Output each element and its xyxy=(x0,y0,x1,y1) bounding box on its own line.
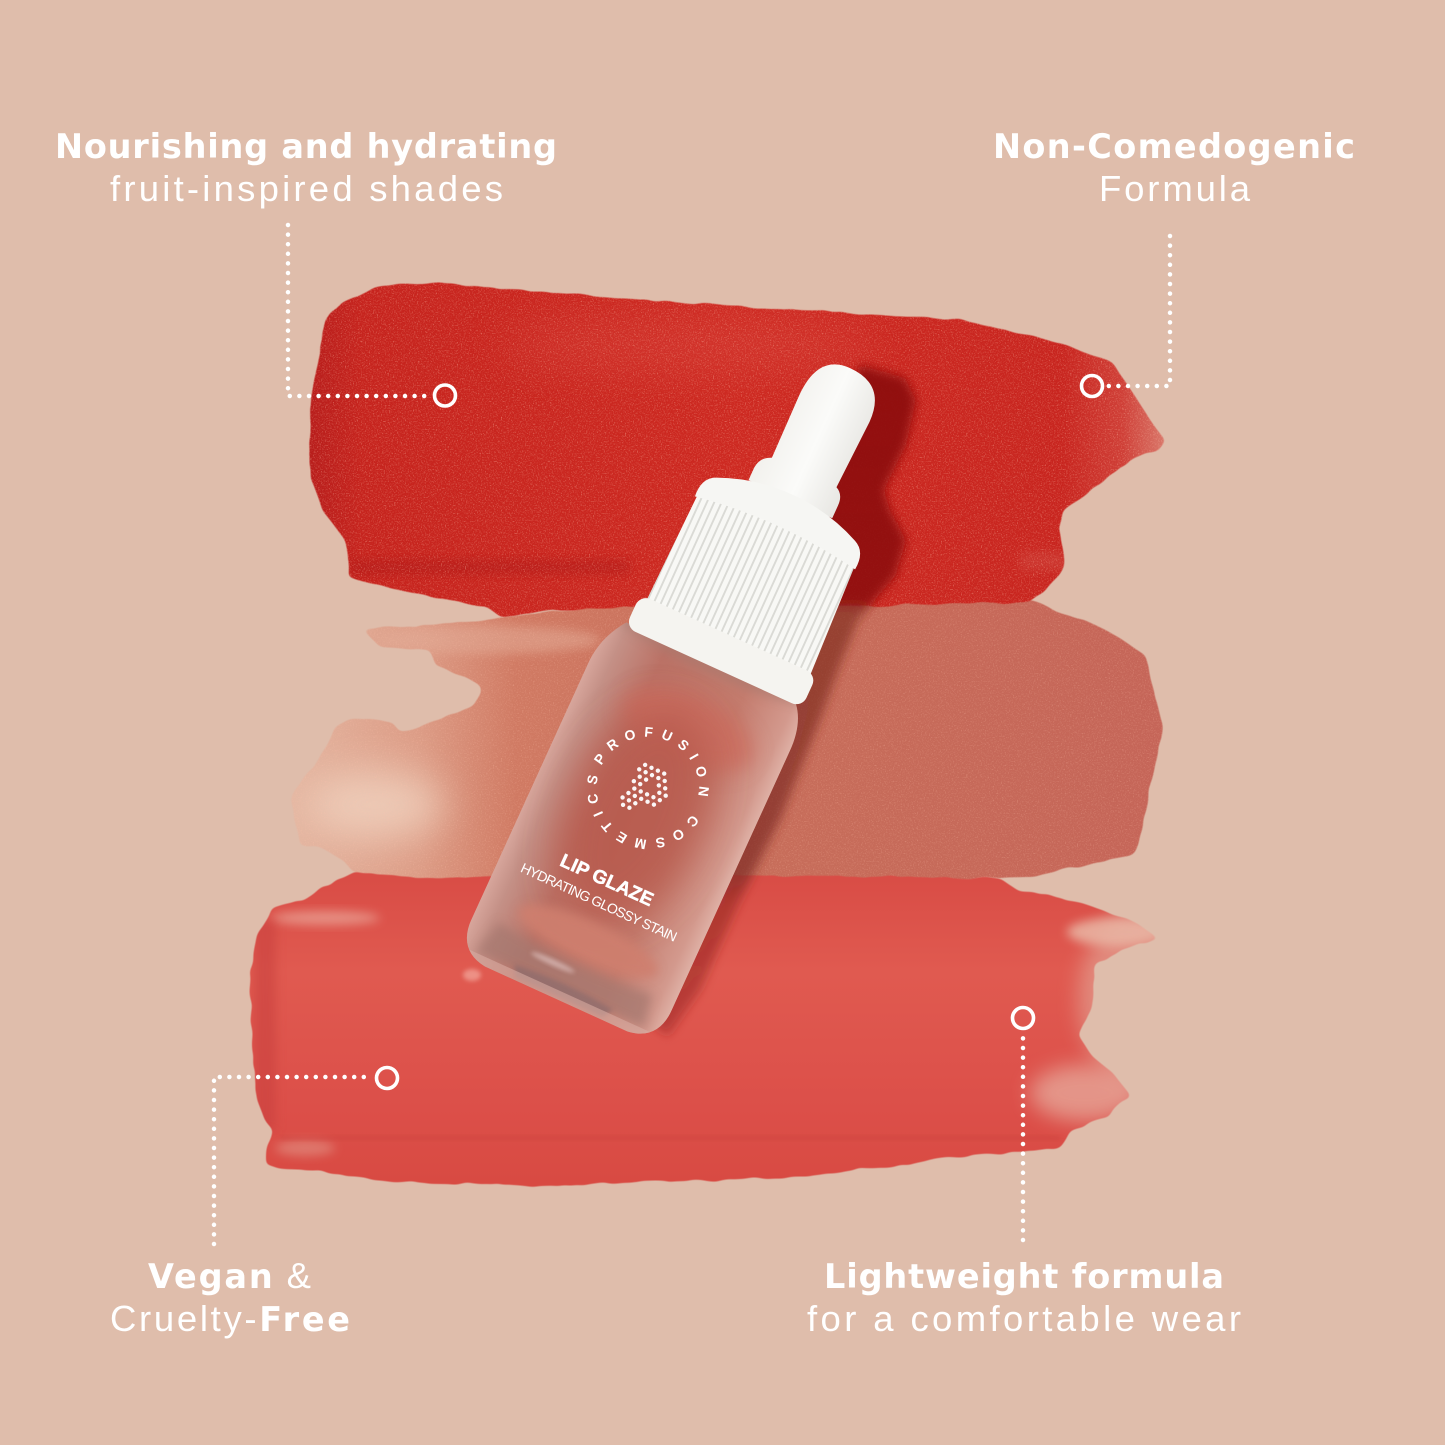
marker bottom-right xyxy=(1012,1008,1034,1028)
subtext top-right: Formula xyxy=(1099,168,1251,209)
product: dropper bottle xyxy=(466,364,875,1034)
heading bottom-left: Vegan & xyxy=(148,1255,311,1296)
swatch: top red smear xyxy=(300,275,1180,620)
cap assembly xyxy=(625,328,938,708)
heading bottom-right: Lightweight formula xyxy=(824,1257,1224,1296)
product name: LIP GLAZE xyxy=(557,851,656,911)
swatch: middle nude-rose smear xyxy=(280,595,1180,890)
connector top-left xyxy=(288,225,432,396)
subtext bottom-left: Cruelty-Free xyxy=(110,1298,350,1339)
brand ring text: PROFUSION COSMETICS xyxy=(587,727,709,850)
heading top-right: Non-Comedogenic xyxy=(993,127,1355,166)
marker bottom-left xyxy=(376,1068,398,1088)
rubber bulb xyxy=(749,349,892,518)
subtext top-left: fruit-inspired shades xyxy=(110,168,503,209)
product subtitle: HYDRATING GLOSSY STAIN xyxy=(518,860,680,945)
brand P logo xyxy=(617,759,677,822)
cap top lip xyxy=(695,458,873,569)
bottle glass xyxy=(466,622,798,1034)
heading top-left: Nourishing and hydrating xyxy=(55,127,557,166)
subtext bottom-right: for a comfortable wear xyxy=(807,1298,1241,1339)
callout: lightweight formula xyxy=(807,1008,1241,1339)
cap ring xyxy=(625,595,817,708)
callout: vegan and cruelty-free xyxy=(110,1068,398,1339)
connector bottom-left xyxy=(214,1077,373,1244)
callout: non-comedogenic xyxy=(993,127,1355,396)
swatch: bottom coral smear xyxy=(249,872,1156,1188)
marker top-left xyxy=(434,385,456,406)
bottle shadow xyxy=(620,365,916,1036)
ribbed cap xyxy=(646,487,862,675)
connector top-right xyxy=(1106,236,1170,386)
connector bottom-right xyxy=(1021,1032,1025,1240)
callout: nourishing and hydrating xyxy=(55,127,557,406)
marker top-right xyxy=(1082,376,1102,396)
